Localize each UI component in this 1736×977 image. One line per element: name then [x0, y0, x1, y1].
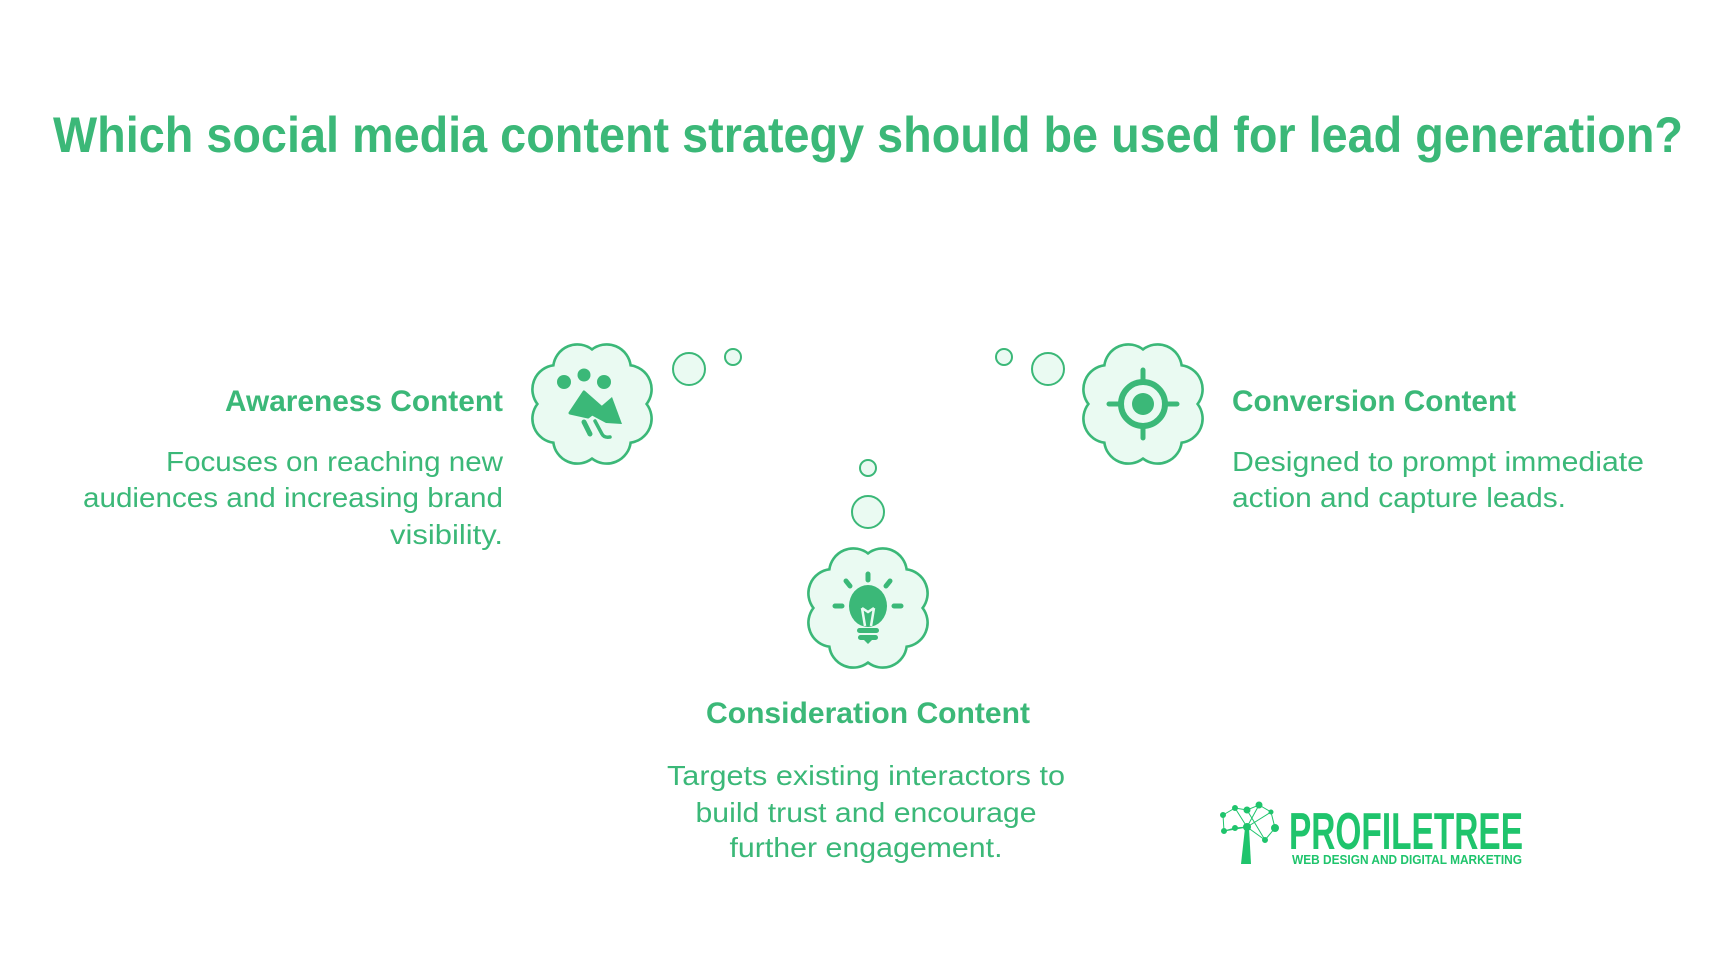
logo tagline: WEB DESIGN AND DIGITAL MARKETING — [1292, 853, 1522, 867]
consideration text: further engagement. — [730, 832, 1002, 863]
logo: ProfileTree — [1220, 802, 1523, 867]
awareness text: audiences and increasing brand — [83, 482, 503, 513]
icon: consideration cloud — [808, 548, 928, 668]
bubbles: consideration — [852, 460, 884, 528]
icon: awareness cloud — [532, 344, 652, 464]
panel: conversion — [1232, 385, 1644, 513]
consideration text: build trust and encourage — [696, 797, 1036, 828]
awareness text: Focuses on reaching new — [166, 446, 504, 477]
conversion text: Designed to prompt immediate — [1232, 446, 1644, 477]
awareness text — [83, 446, 504, 550]
conversion heading: Conversion Content — [1232, 385, 1516, 418]
logo wordmark: PROFILETREE — [1289, 803, 1523, 861]
bubbles: conversion — [996, 349, 1064, 385]
panel: consideration — [667, 697, 1065, 863]
panel: awareness — [83, 385, 504, 550]
awareness heading: Awareness Content — [225, 385, 503, 418]
bubbles: awareness — [673, 349, 741, 385]
awareness text: visibility. — [390, 519, 503, 550]
conversion text — [1232, 446, 1644, 513]
consideration heading: Consideration Content — [706, 697, 1030, 730]
icon: conversion cloud — [1083, 344, 1203, 464]
icon: tree — [1220, 802, 1278, 864]
consideration text — [667, 760, 1065, 863]
conversion text: action and capture leads. — [1232, 482, 1566, 513]
consideration text: Targets existing interactors to — [667, 760, 1065, 791]
